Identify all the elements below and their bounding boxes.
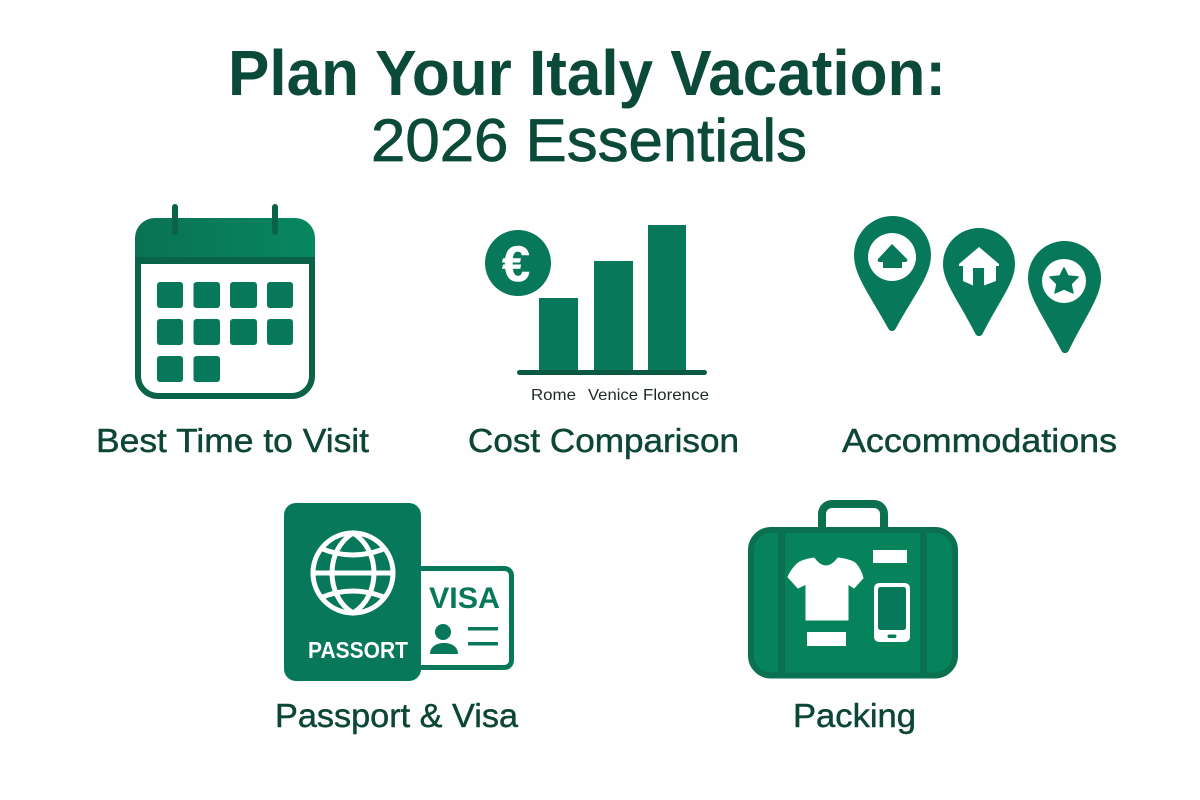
pin: home circle — [854, 216, 931, 331]
chart labels — [531, 387, 709, 404]
pin: house — [943, 228, 1015, 336]
icon: calendar — [135, 204, 315, 396]
icon: suitcase — [751, 504, 955, 676]
label: packing: Packing — [793, 697, 916, 734]
icon: cost bar chart — [485, 225, 709, 404]
icon: euro coin: € — [502, 236, 530, 292]
bar: Florence — [648, 225, 686, 370]
chart labels: Venice — [588, 387, 638, 404]
label: accommodations: Accommodations — [842, 422, 1117, 459]
icon: euro coin — [485, 230, 551, 296]
passport cover — [284, 503, 421, 681]
title: Plan Your Italy Vacation: — [228, 37, 946, 109]
visa card: VISA — [429, 582, 500, 615]
passport cover: PASSORT — [308, 637, 408, 663]
title: 2026 Essentials — [371, 107, 807, 174]
phone — [874, 583, 910, 642]
label: passport and visa: Passport & Visa — [275, 697, 519, 734]
label: cost comparison: Cost Comparison — [468, 422, 739, 459]
bar: Venice — [594, 261, 633, 370]
icon: location pins — [854, 216, 1101, 353]
label: best time to visit: Best Time to Visit — [96, 422, 369, 459]
visa card — [412, 568, 512, 668]
icon: passport and visa — [284, 503, 512, 681]
title — [228, 37, 946, 174]
pin: star circle — [1028, 241, 1101, 353]
chart labels: Florence — [643, 387, 709, 404]
chart labels: Rome — [531, 387, 576, 404]
t-shirt — [788, 558, 863, 620]
bar: Rome — [539, 298, 578, 370]
